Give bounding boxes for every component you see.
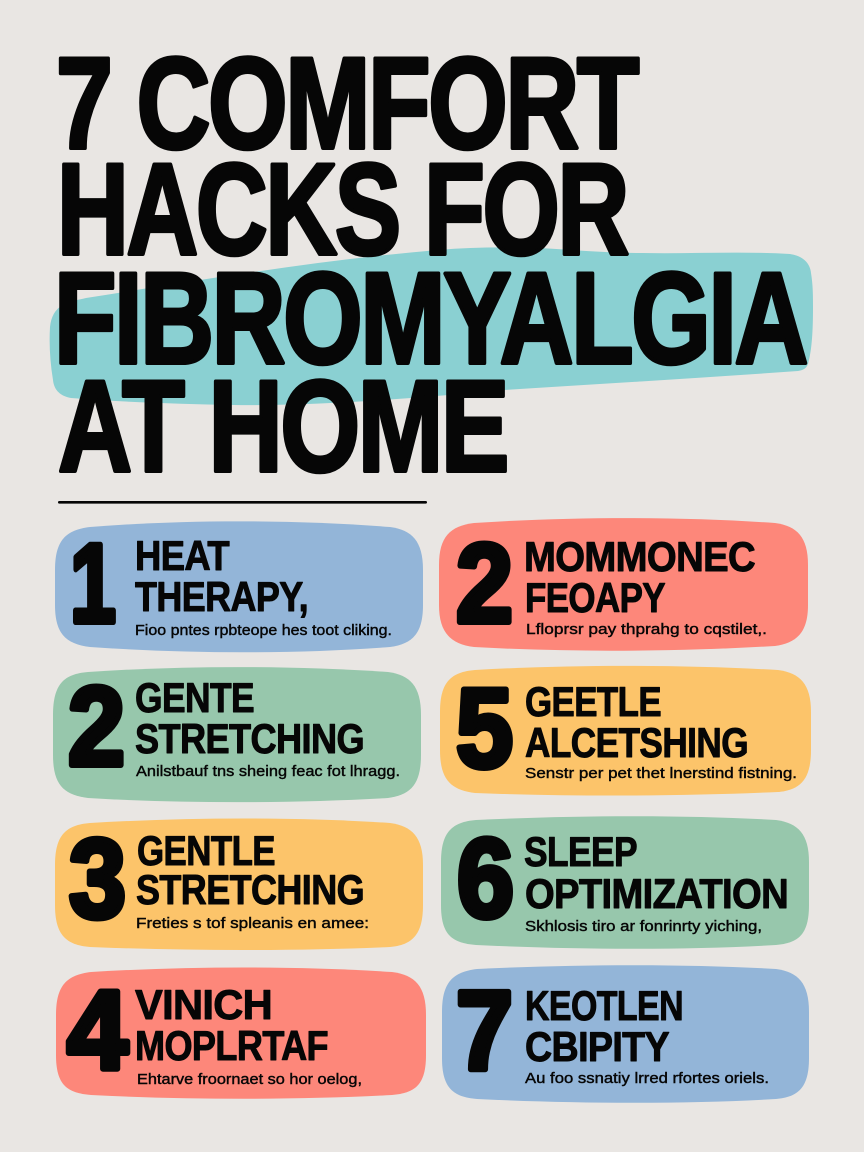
card 1 heading: THERAPY, [135, 573, 308, 620]
card 3 heading: GENTE [135, 674, 254, 721]
card 2 heading [524, 533, 755, 621]
number 4: 4 [67, 968, 128, 1093]
card 4: geetle alcetshing [440, 666, 811, 796]
number 2: 2 [456, 521, 513, 646]
card 3 description: Anilstbauf tns sheing feac fot lhragg. [136, 764, 400, 780]
divider rule [58, 501, 427, 504]
card 2 heading: FEOAPY [525, 574, 666, 621]
card 4 heading [525, 678, 748, 766]
card 6 heading: OPTIMIZATION [525, 870, 788, 917]
card 6 heading [524, 828, 788, 917]
card 1 description: Fioo pntes rpbteope hes toot cliking. [135, 623, 392, 639]
card 7 heading: VINICH [135, 981, 272, 1028]
card 7 description: Ehtarve froornaet so hor oelog, [137, 1072, 362, 1088]
title: 7 COMFORT [56, 30, 639, 176]
card 8 description: Au foo ssnatiy lrred rfortes oriels. [525, 1071, 769, 1087]
card 1: heat therapy [55, 521, 423, 652]
card 6 heading: SLEEP [524, 828, 637, 875]
card 3 heading [135, 674, 364, 762]
card 2 heading: MOMMONEC [524, 533, 755, 580]
card 5 heading [136, 827, 364, 913]
card 8 heading: CBIPITY [525, 1023, 670, 1070]
title: HACKS FOR [57, 136, 628, 282]
card 1 heading: HEAT [135, 532, 230, 579]
card 3: gente stretching [53, 664, 421, 802]
number 2: 2 [68, 664, 125, 789]
card 7: vinich moplrtaf [56, 968, 426, 1099]
card 8 heading: KEOTLEN [525, 982, 683, 1029]
number 3: 3 [69, 816, 126, 941]
card 1 heading [135, 532, 308, 620]
title: AT HOME [58, 353, 507, 499]
card 4 description: Senstr per pet thet lnerstind fistning. [525, 766, 797, 782]
card 5: gentle stretching [55, 816, 423, 950]
card 8: keotlen cbipity [442, 965, 809, 1103]
card 7 heading: MOPLRTAF [135, 1022, 328, 1069]
card 6: sleep optimization [441, 816, 809, 949]
title [54, 30, 806, 499]
card 5 heading: STRETCHING [136, 866, 364, 913]
card 2 description: Lfloprsr pay thprahg to cqstilet,. [526, 622, 767, 638]
card 4 heading: ALCETSHING [525, 719, 748, 766]
card 5 description: Freties s tof spleanis en amee: [136, 916, 369, 932]
card 5 heading: GENTLE [137, 827, 275, 874]
card 4 heading: GEETLE [525, 678, 661, 725]
number 5: 5 [456, 666, 513, 791]
card 7 heading [135, 981, 328, 1069]
number 1: 1 [70, 521, 116, 646]
card 8 heading [525, 982, 683, 1070]
card 3 heading: STRETCHING [135, 715, 364, 762]
number 7: 7 [456, 968, 513, 1093]
card 6 description: Skhlosis tiro ar fonrinrty yiching, [525, 919, 762, 935]
number 6: 6 [457, 816, 514, 941]
highlight brush stroke behind FIBROMYALGIA [50, 247, 813, 405]
card 2: mommonec feoapy [439, 518, 808, 651]
